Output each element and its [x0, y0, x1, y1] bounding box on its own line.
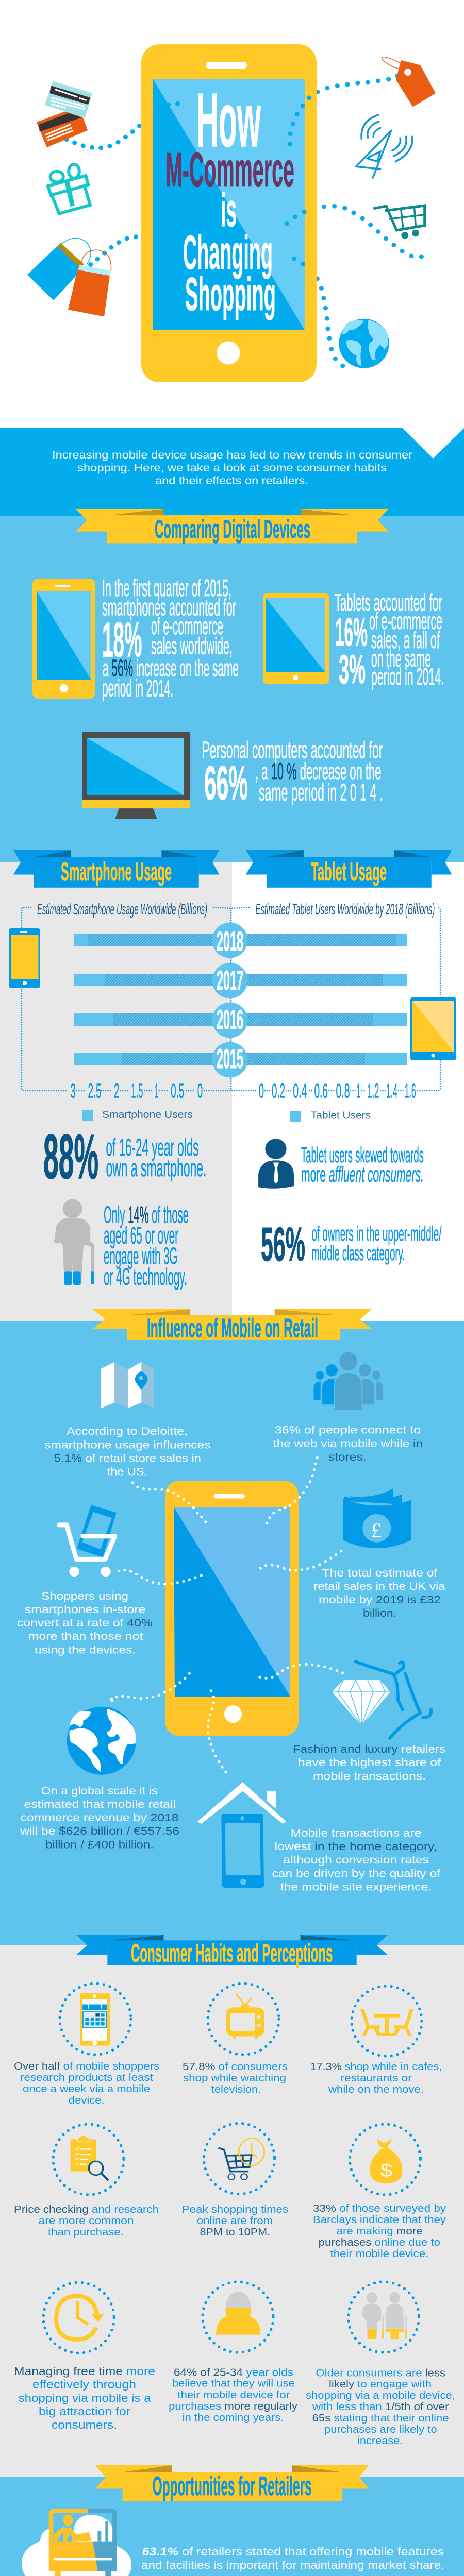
panel: opportunities for retailers [0, 2465, 464, 2576]
stat: 88 percent: of 16-24 year olds [106, 1133, 199, 1161]
ribbon heading: smartphone usage [13, 850, 219, 888]
icon: cafe table [360, 2009, 413, 2036]
icon: shop in cloud [22, 2509, 131, 2576]
icon: elderly couple [362, 2292, 407, 2339]
text: television [183, 2061, 288, 2095]
axis labels: tablet: 0.4 [293, 1080, 307, 1103]
text: television: shop while watching [183, 2073, 286, 2084]
text: in stores: 36% of people connect to [275, 1424, 421, 1436]
text: peak times [182, 2204, 288, 2238]
icon: clock arrow [56, 2296, 104, 2340]
bar chart: 2018 [217, 926, 243, 957]
icon: businessman [258, 1139, 294, 1189]
text: 63.1% of retailers stated that offering mobile features [142, 2545, 444, 2558]
text: cafes [310, 2061, 442, 2095]
stat: only 14 percent [104, 1201, 189, 1290]
smartphone text [102, 574, 239, 702]
icon: tablet [263, 593, 329, 684]
icon: signal tower [356, 115, 412, 178]
ribbon heading: comparing digital devices [76, 509, 389, 544]
legend: tablet users: Tablet Users [311, 1110, 371, 1121]
axis labels: tablet: 0.8 [336, 1080, 350, 1103]
text: home category: Mobile transactions are [291, 1827, 421, 1839]
ribbon heading: opportunities [95, 2465, 369, 2501]
text: peak times: 8PM to 10PM. [200, 2227, 270, 2238]
text: shoppers: smartphones in-store [25, 1603, 146, 1616]
item: market share [22, 2509, 444, 2576]
text: in stores [273, 1424, 423, 1463]
text: over half: once a week via a mobile [23, 2083, 150, 2095]
smartphone text: sales worldwide, [151, 633, 233, 659]
icon: blue tablet [410, 997, 456, 1060]
text: over half: research products at least [20, 2072, 153, 2083]
text: free time: effectively through [32, 2378, 136, 2391]
text: global: On a global scale it is [41, 1785, 158, 1797]
desktop text [202, 737, 383, 810]
icon: monitor [82, 732, 190, 819]
axis labels: smartphone: 1 [155, 1080, 158, 1103]
text: in stores: stores. [328, 1451, 366, 1463]
intro text: and their effects on retailers. [155, 474, 308, 487]
icon: shopping bags [27, 238, 111, 317]
tablet text [335, 589, 444, 692]
desktop text: 66% [204, 756, 248, 810]
dotted connectors on screen [160, 98, 309, 264]
icon: money bag: $ [380, 2160, 392, 2181]
text: Deloitte: According to Deloitte, [67, 1425, 188, 1437]
bar chart: 2016 [217, 1005, 243, 1035]
text: cafes: restaurants or [341, 2073, 412, 2084]
text: free time [14, 2365, 155, 2431]
text: Deloitte: 5.1% of retail store sales in [54, 1452, 201, 1464]
icon: map [101, 1362, 154, 1408]
axis labels: smartphone: 3 [71, 1080, 76, 1103]
panel: comparing digital devices: In the first quarter of 2015, [102, 574, 231, 601]
panel: smartphone and tablet usage [0, 850, 464, 1321]
text: 25-34 year olds: their mobile device for [177, 2389, 290, 2401]
panel: hero [0, 0, 464, 428]
text: Barclays: purchases online due to [319, 2237, 440, 2248]
text: 25-34 year olds [169, 2367, 297, 2424]
panel: smartphone and tablet usage: or 4G technology. [104, 1263, 187, 1290]
text: UK retail: retail sales in the UK via [313, 1580, 445, 1592]
text: UK retail: The total estimate of [322, 1567, 438, 1579]
icon: money bag [370, 2139, 403, 2183]
smartphone text: 18% [102, 613, 142, 668]
title [165, 78, 294, 320]
axis labels: smartphone: 0.5 [171, 1080, 184, 1103]
text: over half: device. [69, 2095, 104, 2106]
ribbon heading: consumer habits [76, 1935, 388, 1968]
text: fashion: Fashion and luxury retailers [293, 1743, 445, 1755]
text: older consumers: Older consumers are less [316, 2368, 445, 2379]
icon: clipboard [71, 2136, 108, 2180]
intro text [52, 449, 412, 487]
smartphone stat [32, 574, 239, 702]
central phone [165, 1481, 299, 1736]
text: fashion: have the highest share of [298, 1756, 441, 1769]
panel: comparing digital devices: smartphones accounted for [102, 594, 236, 620]
panel: comparing digital devices [0, 509, 464, 862]
text: free time: shopping via mobile is a [19, 2392, 151, 2404]
text: free time: big attraction for [39, 2405, 130, 2418]
axis labels: smartphone: 1.5 [131, 1080, 143, 1103]
text: shoppers [17, 1590, 153, 1656]
text: peak times: online are from [197, 2215, 273, 2227]
hero phone [141, 44, 317, 382]
intro text: Increasing mobile device usage has led to new trends in consumer [52, 449, 412, 461]
bar chart [74, 922, 407, 1078]
axis labels: smartphone: 2 [114, 1080, 120, 1103]
text: over half [14, 2061, 159, 2106]
ribbon heading: influence of mobile [93, 1309, 372, 1343]
panel: smartphone and tablet usage: 0 [197, 1080, 203, 1103]
dotted connector lines [67, 70, 421, 366]
icon: shopping cart [373, 206, 425, 239]
tablet text: 3% [339, 646, 366, 692]
text: in stores: the web via mobile while in [273, 1437, 423, 1450]
text: shoppers: convert at a rate of 40% [17, 1617, 153, 1629]
intro text: shopping. Here, we take a look at some consumer habits [77, 462, 387, 474]
bar chart: 2017 [217, 965, 243, 996]
text: fashion [293, 1743, 445, 1783]
text: Barclays: their mobile device. [330, 2248, 428, 2260]
text: free time: consumers. [52, 2418, 117, 2431]
icon: price tag [382, 57, 436, 107]
text: peak times: Peak shopping times [182, 2204, 288, 2215]
text: over half: Over half of mobile shoppers [14, 2061, 159, 2072]
axis labels: tablet: 0.6 [314, 1080, 328, 1103]
text: Deloitte: the US. [107, 1465, 147, 1478]
text: 25-34 year olds: purchases more regularly [169, 2401, 297, 2412]
text: UK retail: billion. [363, 1607, 396, 1619]
title: Shopping [185, 268, 276, 320]
text: price checking: are more common [39, 2215, 134, 2227]
text: Barclays: are making more [337, 2226, 423, 2237]
text: older consumers: with less than 1/5th of over [312, 2401, 449, 2413]
text: older consumers: shopping via a mobile device, [306, 2390, 455, 2401]
tablet text: 16% [335, 610, 368, 654]
axis labels: tablet: 0.2 [272, 1080, 285, 1103]
title: How [196, 78, 261, 163]
text: price checking: than purchase. [48, 2227, 124, 2238]
dotted icon rings [43, 1984, 422, 2353]
stat: only 14 percent: engage with 3G [104, 1243, 177, 1269]
panel: hero: M-Commerce [165, 143, 294, 196]
legend: smartphone users: Smartphone Users [102, 1109, 193, 1121]
text: Barclays [313, 2203, 446, 2260]
panel: intro band [0, 428, 464, 516]
text: global: estimated that mobile retail [24, 1798, 176, 1810]
notch [403, 428, 464, 459]
text: price checking [14, 2204, 159, 2238]
text: home category: lowest in the home category, [275, 1840, 437, 1853]
icon: diamond and hanger [332, 1662, 431, 1738]
panel: smartphone and tablet usage: own a smartphone. [106, 1154, 206, 1181]
bar chart: 2015 [217, 1044, 243, 1074]
panel: smartphone and tablet usage: 1.6 [405, 1080, 416, 1103]
axis labels: tablet: 1.2 [367, 1080, 379, 1103]
stat: only 14 percent: aged 65 or over [104, 1222, 178, 1249]
text: 25-34 year olds: 64% of 25-34 year olds [174, 2367, 293, 2379]
title: is [221, 184, 237, 236]
text: shoppers: more than those not [28, 1630, 143, 1642]
text: older consumers: purchases are likely to [324, 2424, 437, 2435]
icon: cart and clock [219, 2139, 264, 2180]
text: global: will be $626 billion / €557.56 [20, 1825, 179, 1837]
icon: globe [67, 1707, 136, 1775]
text: older consumers: likely to engage with [329, 2379, 432, 2390]
icon: money: £ [371, 1519, 382, 1542]
desktop stat [82, 732, 383, 819]
icon: house and phone [197, 1782, 286, 1888]
tablet stat [263, 589, 444, 692]
panel: influence of mobile on retail [0, 1309, 464, 1945]
title: Changing [183, 226, 273, 279]
white dotted connectors [111, 1458, 343, 1772]
text: shoppers: using the devices. [35, 1643, 136, 1656]
icon: phone calendar [80, 1993, 110, 2045]
icon: person [216, 2292, 260, 2335]
text: home category: can be driven by the quality of [272, 1867, 440, 1879]
axis labels: tablet: 1.4 [386, 1080, 397, 1103]
text: Barclays: Barclays indicate that they [313, 2214, 446, 2226]
smartphone text: a 56% increase on the same [103, 654, 239, 681]
legend: tablet users [290, 1110, 371, 1122]
icon: credit cards [38, 82, 91, 146]
icon: gift [48, 164, 90, 214]
ribbon heading: tablet usage [246, 850, 452, 888]
icon: elderly person [54, 1199, 94, 1285]
stat: 88 percent: 88% [43, 1122, 98, 1192]
text: television: 57.8% of consumers [183, 2061, 288, 2073]
text: 25-34 year olds: in the coming years. [183, 2412, 284, 2424]
stat: 56 percent: 56% [261, 1217, 305, 1271]
text: Barclays: 33% of those surveyed by [313, 2203, 446, 2214]
text: price checking: Price checking and research [14, 2204, 159, 2215]
text: older consumers: increase. [357, 2435, 403, 2447]
smartphone text: period in 2014. [102, 675, 173, 702]
text: home category: although conversion rates [283, 1854, 429, 1866]
axis labels: tablet: 1 [357, 1080, 360, 1103]
text: Deloitte [44, 1425, 211, 1478]
text: cafes: 17.3% shop while in cafes, [310, 2061, 442, 2073]
chart frame dotted lines [22, 907, 440, 1091]
axis labels: tablet [259, 1080, 416, 1103]
text: older consumers [306, 2368, 455, 2447]
text: global: commerce revenue by 2018 [21, 1811, 179, 1824]
axis labels: tablet: 0 [259, 1080, 264, 1103]
text: 25-34 year olds: believe that they will use [172, 2378, 295, 2389]
text: home category [272, 1827, 440, 1893]
text: shoppers: Shoppers using [41, 1590, 128, 1602]
text: Deloitte: smartphone usage influences [44, 1438, 211, 1451]
text: older consumers: 65s stating that their online [312, 2413, 449, 2424]
panel: smartphone and tablet usage: Estimated Smartphone Usage Worldwide (Billions) [37, 900, 207, 918]
stat: only 14 percent: Only 14% of those [104, 1201, 189, 1228]
icon: smartphone [32, 579, 95, 699]
icon: group of people [313, 1352, 383, 1410]
text: global: billion / £400 billion. [45, 1838, 154, 1851]
icon: cart with phone [59, 1506, 115, 1577]
axis labels: smartphone [71, 1080, 203, 1103]
icon: globe [339, 319, 389, 368]
axis labels: smartphone: 2.5 [88, 1080, 101, 1103]
ribbon heading: smartphone usage: Smartphone Usage [61, 857, 172, 886]
text: UK retail [313, 1567, 445, 1619]
text: UK retail: mobile by 2019 is £32 [319, 1594, 441, 1606]
icon: television [226, 1994, 264, 2039]
text: free time: Managing free time more [14, 2365, 155, 2378]
panel: consumer habits and perceptions [0, 1935, 464, 2477]
text: global [20, 1785, 179, 1851]
text [141, 2545, 444, 2571]
stat: tablet users [301, 1143, 424, 1187]
icon: money [343, 1488, 411, 1548]
text: and facilities is important for maintaining market share. [141, 2558, 444, 2571]
icon: blue phone [9, 928, 40, 988]
smartphone text: of e-commerce [151, 613, 223, 639]
text: television: television. [211, 2084, 261, 2095]
text: fashion: mobile transactions. [313, 1770, 426, 1783]
text: home category: the mobile site experience. [280, 1880, 432, 1893]
stat: 56 percent [261, 1217, 442, 1271]
text: cafes: while on the move. [328, 2084, 424, 2095]
